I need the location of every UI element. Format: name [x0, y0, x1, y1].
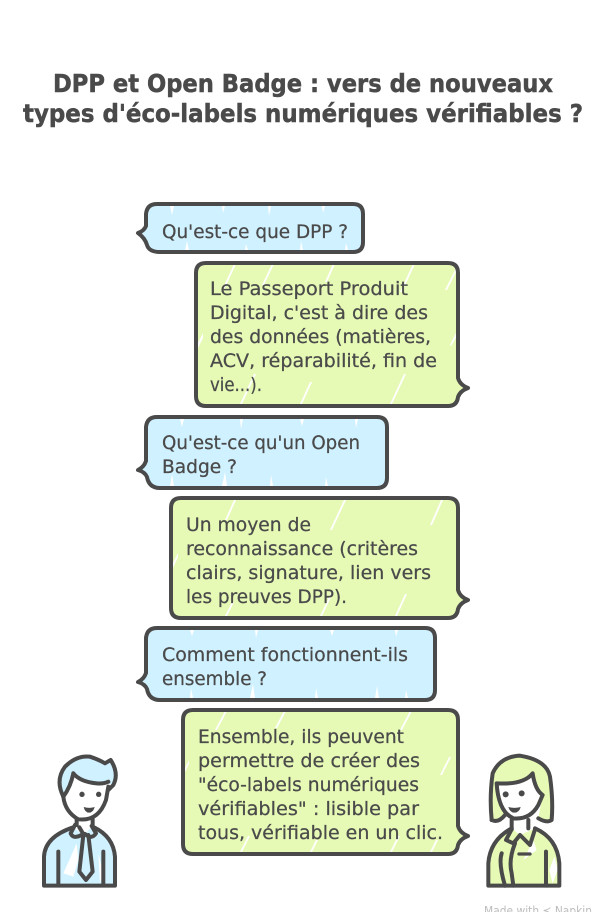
answer bubble: digital product passport — [196, 263, 468, 406]
answer bubble: digital product passport: Digital, c'est à dire des — [210, 302, 428, 324]
answer bubble: digital product passport: ACV, réparabilité, fin de — [210, 350, 437, 372]
answer bubble: means of recognition: les preuves DPP). — [186, 586, 347, 608]
title: DPP et Open Badge : vers de nouveaux — [53, 69, 553, 98]
answer bubble: digital product passport: des données (matières, — [210, 326, 431, 348]
answer bubble: verifiable digital eco-labels — [183, 710, 468, 854]
answer bubble: means of recognition: Un moyen de — [186, 514, 311, 536]
answer bubble: means of recognition — [171, 498, 468, 618]
question bubble: how do they work together: ensemble ? — [162, 668, 267, 690]
answer bubble: verifiable digital eco-labels: Ensemble, ils peuvent — [198, 726, 404, 748]
question bubble: what is DPP: Qu'est-ce que DPP ? — [162, 221, 348, 243]
question bubble: what is an Open Badge: Badge ? — [162, 456, 237, 478]
question bubble: what is an Open Badge: Qu'est-ce qu'un Open — [162, 432, 360, 454]
title — [23, 69, 583, 128]
question bubble: how do they work together — [138, 628, 435, 700]
answer bubble: verifiable digital eco-labels: vérifiables" : lisible par — [198, 798, 419, 820]
question bubble: what is an Open Badge — [138, 417, 387, 488]
question bubble: how do they work together: Comment fonctionnent-ils — [162, 644, 408, 666]
answer bubble: digital product passport: vie...). — [210, 374, 262, 396]
question bubble: what is DPP — [138, 204, 363, 252]
answer bubble: means of recognition: reconnaissance (critères — [186, 538, 418, 560]
answer bubble: means of recognition: clairs, signature, lien vers — [186, 562, 431, 584]
answer bubble: verifiable digital eco-labels: permettre de créer des — [198, 750, 420, 772]
answer bubble: verifiable digital eco-labels: tous, vérifiable en un clic. — [198, 822, 443, 844]
icon: woman with green jacket — [488, 756, 559, 886]
icon: man with tie — [44, 756, 116, 886]
answer bubble: verifiable digital eco-labels: "éco-labels numériques — [198, 774, 419, 796]
answer bubble: digital product passport: Le Passeport Produit — [210, 278, 408, 300]
